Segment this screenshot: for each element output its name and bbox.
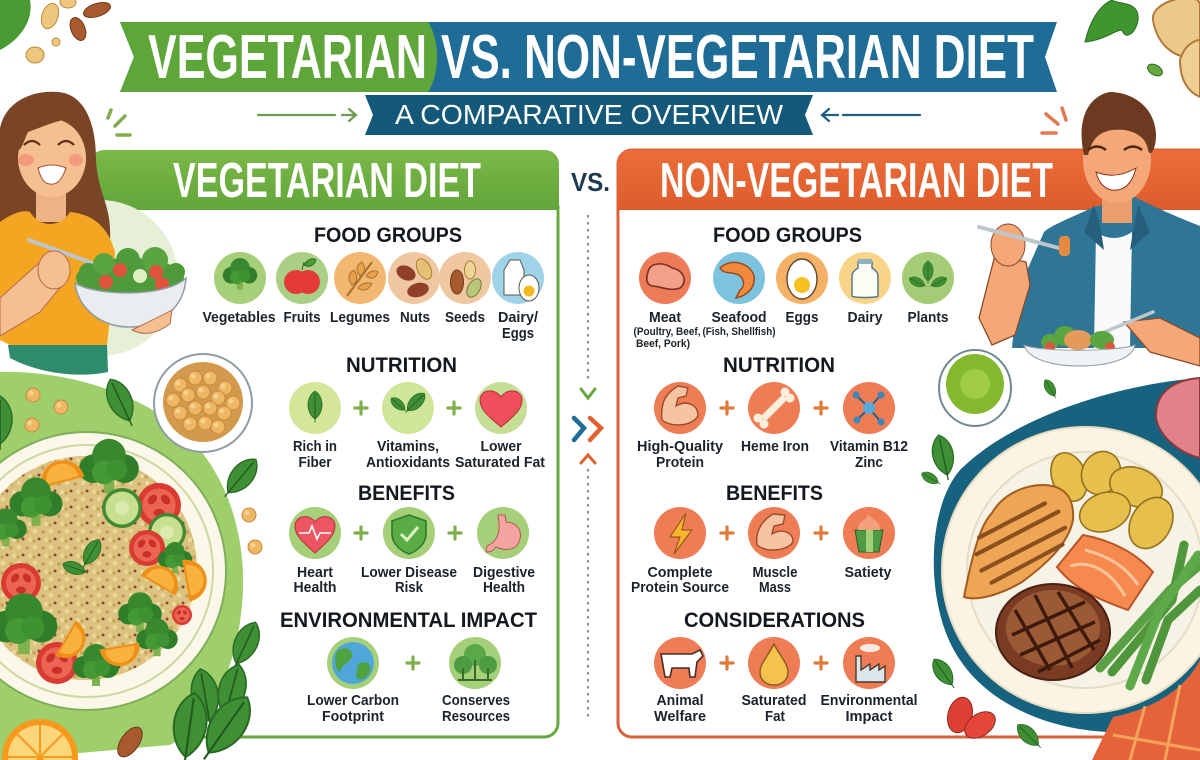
plus — [721, 527, 733, 539]
title text — [148, 23, 1034, 92]
consideration: animal welfare: Animal — [656, 692, 704, 709]
consideration: saturated fat: Saturated — [742, 692, 806, 709]
food group: seeds — [439, 252, 491, 326]
subtitle banner: A COMPARATIVE OVERVIEW — [395, 99, 784, 130]
nutrition: vitamins, antioxidants: Vitamins, — [377, 438, 439, 455]
benefit: satiety — [843, 507, 895, 581]
nutrition: heme iron: Heme Iron — [741, 438, 809, 455]
benefit: heart health: Heart — [297, 564, 333, 581]
benefit: digestive health: Digestive — [473, 564, 535, 581]
non-veg section heading: benefits: BENEFITS — [726, 482, 823, 505]
non-veg section heading: considerations: CONSIDERATIONS — [684, 609, 865, 632]
food group: seafood — [702, 252, 776, 338]
illustration: orange napkin — [1092, 660, 1200, 760]
nutrition: lower saturated fat: Lower — [480, 438, 522, 455]
nutrition: vitamin b12 and zinc: Vitamin B12 — [830, 438, 908, 455]
food group: vegetables: Vegetables — [202, 309, 276, 326]
food group: legumes — [330, 252, 390, 326]
environment: conserves resources — [442, 637, 510, 725]
consideration: environmental impact — [820, 637, 918, 725]
food group: legumes: Legumes — [330, 309, 390, 326]
asparagus — [1100, 545, 1200, 686]
benefit: muscle mass — [748, 507, 800, 596]
food group: seafood: (Fish, Shellfish) — [702, 326, 776, 338]
center divider with arrows — [574, 216, 601, 722]
food group: eggs: Eggs — [786, 309, 818, 326]
title text: VEGETARIAN — [148, 23, 427, 92]
environment: lower carbon footprint: Lower Carbon — [307, 692, 399, 709]
plus — [355, 402, 367, 414]
nutrition: lower saturated fat: Saturated Fat — [455, 454, 545, 471]
nutrition: vitamins, antioxidants — [366, 382, 450, 471]
benefit: complete protein source — [631, 507, 729, 596]
benefit: lower disease risk — [361, 507, 457, 596]
consideration: saturated fat — [742, 637, 806, 725]
illustration: salad bowl — [75, 247, 186, 333]
consideration: animal welfare — [654, 637, 706, 725]
food group: dairy and eggs: Dairy/ — [498, 309, 539, 326]
benefit: satiety: Satiety — [844, 564, 892, 581]
woman's sparkle marks — [108, 110, 130, 135]
illustration: spinach bunch — [168, 661, 261, 760]
illustration: chickpea bowl — [154, 354, 252, 452]
benefit: lower disease risk: Lower Disease — [361, 564, 457, 581]
nutrition: lower saturated fat — [455, 382, 545, 471]
food group: dairy and eggs: Eggs — [502, 325, 534, 342]
food group: fruits: Fruits — [284, 309, 320, 326]
plus — [721, 402, 733, 414]
food group: meat — [634, 252, 700, 350]
panel heading: vegetarian diet: VEGETARIAN DIET — [173, 154, 481, 208]
plus — [407, 657, 419, 669]
food group: meat: (Poultry, Beef, — [634, 326, 700, 338]
illustration: man's small plate — [1024, 312, 1200, 366]
food group: eggs — [776, 252, 828, 326]
plus — [815, 657, 827, 669]
food group: vegetables — [202, 252, 276, 326]
non-veg section heading: food groups: FOOD GROUPS — [713, 224, 862, 247]
benefit: digestive health — [473, 507, 535, 596]
vs label: VS. — [571, 167, 610, 197]
subtitle banner — [365, 95, 813, 135]
illustration: orange slice and almond — [2, 719, 147, 760]
food group: nuts: Nuts — [400, 309, 430, 326]
environment: lower carbon footprint: Footprint — [322, 708, 384, 725]
non-veg section heading: nutrition: NUTRITION — [723, 354, 835, 377]
panel: vegetarian diet — [90, 150, 559, 737]
veg section heading: environmental impact: ENVIRONMENTAL IMPACT — [280, 609, 537, 632]
illustration: green background blob with quinoa plate — [0, 372, 243, 760]
man's sparkle marks — [1042, 108, 1066, 133]
food group: meat: Meat — [649, 309, 681, 326]
basil leaf garnish — [919, 377, 1060, 753]
consideration: saturated fat: Fat — [765, 708, 785, 725]
food group: dairy and eggs — [492, 252, 544, 342]
benefit: heart health: Health — [294, 579, 336, 596]
salmon fillet — [1057, 535, 1153, 610]
nutrition: vitamin b12 and zinc: Zinc — [855, 454, 883, 471]
nutrition: heme iron — [741, 382, 809, 455]
illustration: man eating — [979, 92, 1200, 348]
plus — [815, 527, 827, 539]
illustration: woman eating salad — [0, 92, 178, 375]
benefit: muscle mass: Mass — [759, 579, 791, 596]
benefit: complete protein source: Complete — [648, 564, 712, 581]
benefit: heart health — [289, 507, 341, 596]
nutrition: rich in fiber: Rich in — [293, 438, 337, 455]
environment: conserves resources: Conserves — [442, 692, 510, 709]
plus — [449, 527, 461, 539]
benefit: digestive health: Health — [483, 579, 525, 596]
nutrition: rich in fiber — [289, 382, 341, 471]
title banner — [120, 22, 1057, 92]
nutrition: high-quality protein: High-Quality — [637, 438, 724, 455]
veg section heading: benefits: BENEFITS — [358, 482, 455, 505]
raw steak at plate edge — [1156, 378, 1200, 458]
consideration: environmental impact: Impact — [846, 708, 892, 725]
food group: plants — [902, 252, 954, 326]
nutrition: rich in fiber: Fiber — [298, 454, 332, 471]
nutrition: high-quality protein: Protein — [656, 454, 704, 471]
plus — [448, 402, 460, 414]
top-left scattered nuts and leaf — [0, 0, 112, 63]
top-right bread and parsley — [1085, 0, 1200, 97]
illustration: spinach leaves and chickpeas — [0, 375, 266, 674]
plus — [815, 402, 827, 414]
benefit: muscle mass: Muscle — [752, 564, 798, 581]
benefit: lower disease risk: Risk — [395, 579, 424, 596]
veg section heading: food groups: FOOD GROUPS — [314, 224, 462, 247]
panel: non-vegetarian diet — [617, 150, 1200, 737]
food group: plants: Plants — [908, 309, 948, 326]
nutrition: vitamin b12 and zinc — [830, 382, 908, 471]
grilled steak — [996, 584, 1110, 680]
illustration: green pesto bowl — [939, 350, 1011, 426]
grilled chicken breast — [964, 485, 1073, 598]
food group: dairy: Dairy — [848, 309, 883, 326]
arrow: right pointing to subtitle — [822, 109, 920, 121]
illustration: cut tomato — [944, 695, 1000, 744]
illustration: blue background blob with meat plate — [919, 377, 1200, 753]
food group: seeds: Seeds — [445, 309, 485, 326]
consideration: animal welfare: Welfare — [654, 708, 706, 725]
roasted potatoes — [1044, 445, 1182, 556]
food group: meat: Beef, Pork) — [636, 338, 690, 350]
nutrition: vitamins, antioxidants: Antioxidants — [366, 454, 450, 471]
plus — [721, 657, 733, 669]
veg section heading: nutrition: NUTRITION — [346, 354, 457, 377]
food group: nuts — [388, 252, 440, 326]
environment: conserves resources: Resources — [442, 708, 510, 725]
quinoa base — [0, 456, 197, 680]
food group: dairy — [839, 252, 891, 326]
food group: seafood: Seafood — [712, 309, 766, 326]
consideration: environmental impact: Environmental — [820, 692, 918, 709]
environment: lower carbon footprint — [307, 637, 399, 725]
food group: fruits — [276, 252, 328, 326]
plus — [355, 527, 367, 539]
nutrition: high-quality protein — [637, 382, 724, 471]
arrow: left pointing to subtitle — [258, 109, 356, 121]
benefit: complete protein source: Protein Source — [631, 579, 729, 596]
salad toppings — [0, 439, 210, 686]
